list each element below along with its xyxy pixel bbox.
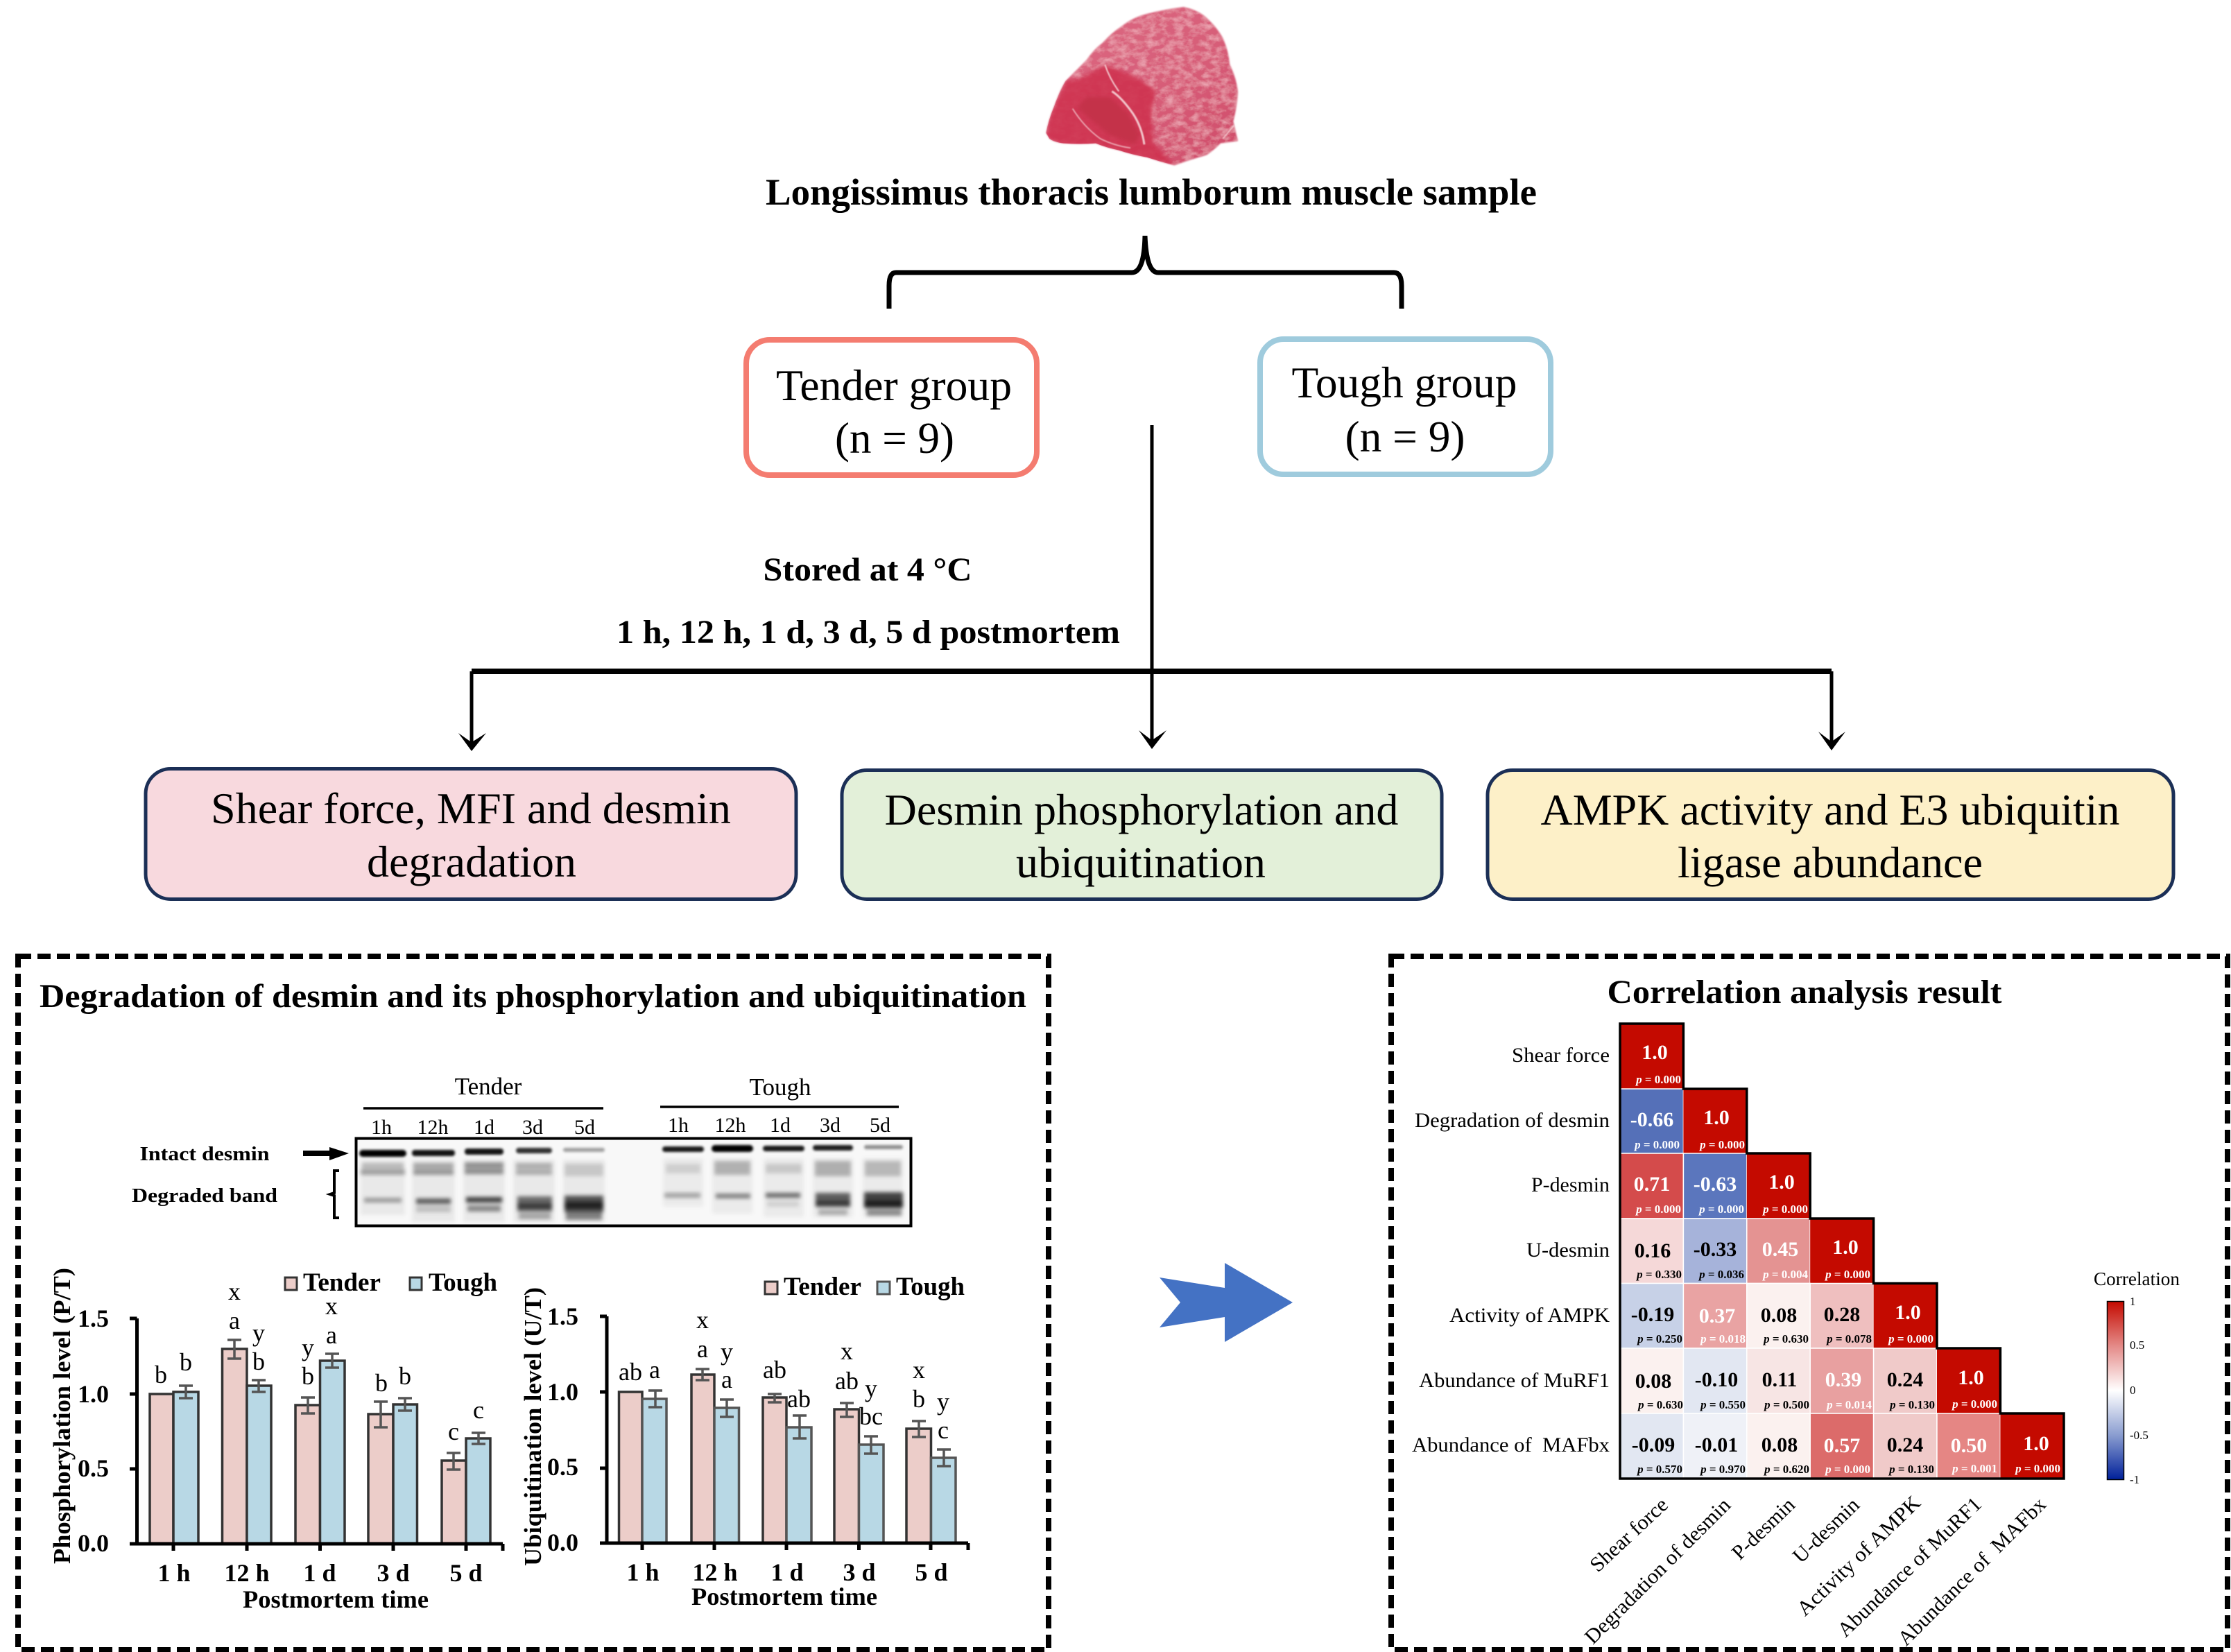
bar chart: phosphorylation <box>49 1268 503 1613</box>
significance letters: b <box>252 1348 265 1375</box>
significance letters: a <box>326 1321 337 1349</box>
arrow: to correlation panel <box>1160 1263 1293 1342</box>
arrow: intact desmin <box>303 1147 349 1160</box>
blot lane labels: 12h <box>714 1114 746 1137</box>
blot lane labels: 5d <box>574 1116 595 1139</box>
x tick labels: 5 d <box>449 1559 483 1587</box>
row: AMPK: p = 0.000 <box>1887 1332 1933 1345</box>
box: tough group <box>1260 339 1551 474</box>
box: tough group: Tough group <box>1291 359 1517 407</box>
x tick labels: 3 d <box>843 1558 876 1586</box>
error bars <box>648 1369 951 1466</box>
row: degradation: p = 0.000 <box>1633 1138 1680 1151</box>
y-axis title: Ubiquitination level (U/T) <box>519 1287 546 1566</box>
significance letters: y <box>721 1338 733 1366</box>
row: MuRF1: p = 0.130 <box>1888 1398 1935 1411</box>
row: U-desmin: 0.45 <box>1762 1238 1798 1261</box>
significance letters: b <box>302 1362 314 1390</box>
y tick labels: 0.0 <box>78 1529 109 1557</box>
y-axis title: Phosphorylation level (P/T) <box>49 1268 76 1564</box>
panel heading: Correlation analysis result <box>1608 974 2002 1010</box>
significance letters: c <box>938 1416 949 1444</box>
legend <box>765 1273 965 1301</box>
row: shear force: p = 0.000 <box>1635 1073 1681 1086</box>
row labels: U-desmin <box>1526 1239 1610 1262</box>
row: MAFbx: p = 0.970 <box>1699 1463 1746 1476</box>
significance letters: bc <box>859 1402 883 1430</box>
row: MAFbx: 0.57 <box>1824 1434 1860 1457</box>
row: degradation: p = 0.000 <box>1698 1138 1745 1151</box>
row: MuRF1 <box>1620 1348 2000 1413</box>
meat photo <box>1046 7 1238 165</box>
row: P-desmin: -0.63 <box>1694 1173 1737 1196</box>
significance letters: a <box>697 1335 708 1363</box>
legend ticks: -1 <box>2130 1473 2139 1486</box>
x tick labels: 12 h <box>692 1558 738 1586</box>
blot group labels <box>363 1073 899 1108</box>
x-axis title: Postmortem time <box>691 1583 877 1610</box>
blot group labels: Tough <box>750 1074 811 1101</box>
row: AMPK: 0.37 <box>1699 1305 1735 1327</box>
column labels: Shear force <box>1585 1493 1673 1576</box>
legend: Tough <box>896 1273 965 1301</box>
x-axis title: Postmortem time <box>243 1585 429 1613</box>
legend ticks: 0 <box>2130 1384 2136 1397</box>
row: U-desmin: p = 0.004 <box>1761 1268 1808 1281</box>
row labels: Degradation of desmin <box>1415 1109 1610 1132</box>
western blot <box>132 1073 911 1226</box>
x tick labels: 1 d <box>303 1559 336 1587</box>
row labels: Activity of AMPK <box>1449 1304 1610 1327</box>
box: shear force: degradation <box>367 837 576 886</box>
row: AMPK: -0.19 <box>1631 1303 1674 1326</box>
x tick labels: 1 d <box>770 1558 804 1586</box>
row: P-desmin: p = 0.000 <box>1761 1203 1808 1216</box>
significance letters: c <box>473 1396 484 1424</box>
column labels <box>1580 1491 2051 1651</box>
blot lane labels: 1h <box>668 1114 689 1137</box>
significance letters: x <box>325 1292 338 1320</box>
error bars <box>179 1340 485 1470</box>
row labels: Abundance of MuRF1 <box>1419 1369 1610 1392</box>
significance letters <box>155 1277 484 1445</box>
legend ticks: 0.5 <box>2130 1339 2144 1352</box>
significance letters: ab <box>763 1356 786 1384</box>
label: degraded band: Degraded band <box>132 1185 277 1207</box>
row: AMPK: p = 0.630 <box>1762 1332 1809 1345</box>
box: desmin modification: Desmin phosphorylation and <box>885 785 1398 834</box>
significance letters: b <box>913 1385 925 1413</box>
box: tender group: Tender group <box>776 361 1012 410</box>
row: shear force: 1.0 <box>1642 1041 1668 1064</box>
row labels: Abundance of MAFbx <box>1412 1434 1610 1456</box>
row: U-desmin: 1.0 <box>1832 1236 1859 1259</box>
significance letters: ab <box>619 1358 642 1386</box>
row: MAFbx: p = 0.001 <box>1951 1462 1997 1475</box>
legend ticks: 1 <box>2130 1295 2136 1308</box>
intact bands <box>359 1145 903 1157</box>
y tick labels: 1.5 <box>547 1302 578 1330</box>
row: MAFbx: p = 0.570 <box>1636 1463 1682 1476</box>
panel: degradation <box>18 956 1049 1650</box>
upper degraded bands <box>361 1161 901 1176</box>
blot lane labels: 3d <box>820 1114 841 1137</box>
significance letters: y <box>865 1375 877 1402</box>
row: AMPK: 0.08 <box>1761 1304 1797 1327</box>
column labels: Activity of AMPK <box>1793 1491 1925 1621</box>
legend <box>285 1268 497 1297</box>
row: P-desmin <box>1620 1153 1810 1219</box>
blot lane labels: 1d <box>474 1116 494 1139</box>
significance letters: a <box>721 1366 732 1393</box>
blot lane labels: 5d <box>870 1114 890 1137</box>
significance letters: b <box>399 1362 411 1390</box>
y tick labels: 0.5 <box>547 1453 578 1481</box>
row: MuRF1: -0.10 <box>1695 1368 1738 1391</box>
axes <box>600 1316 968 1550</box>
significance letters: x <box>696 1306 709 1334</box>
row: MAFbx: p = 0.000 <box>1824 1463 1870 1476</box>
blot lane labels: 1d <box>770 1114 791 1137</box>
legend ticks <box>2130 1295 2148 1486</box>
row: U-desmin: -0.33 <box>1694 1238 1737 1261</box>
x tick labels: 5 d <box>915 1558 948 1586</box>
label: intact desmin: Intact desmin <box>140 1143 269 1165</box>
column labels: Abundance of MAFbx <box>1893 1493 2051 1651</box>
row: MuRF1: p = 0.500 <box>1763 1398 1809 1411</box>
row: MuRF1: p = 0.630 <box>1637 1398 1683 1411</box>
significance letters: x <box>913 1356 925 1384</box>
row: shear force <box>1620 1024 1683 1089</box>
significance letters: ab <box>787 1385 811 1413</box>
y tick labels: 1.0 <box>547 1378 578 1406</box>
blot lane labels: 1h <box>371 1116 392 1139</box>
row: P-desmin: p = 0.000 <box>1698 1203 1744 1216</box>
significance letters: x <box>841 1337 853 1365</box>
x tick labels: 1 h <box>626 1558 660 1586</box>
row: MuRF1: 0.39 <box>1825 1368 1861 1391</box>
significance letters: a <box>649 1356 660 1384</box>
y tick labels: 1.0 <box>78 1380 109 1408</box>
box: tough group: (n = 9) <box>1345 413 1465 461</box>
row: MAFbx: p = 0.620 <box>1763 1463 1809 1476</box>
row: degradation: 1.0 <box>1703 1106 1730 1129</box>
significance letters: b <box>180 1348 192 1376</box>
significance letters: b <box>155 1361 167 1388</box>
row: U-desmin: p = 0.330 <box>1635 1268 1682 1281</box>
y tick labels: 1.5 <box>78 1305 109 1332</box>
row: MAFbx: p = 0.000 <box>2014 1462 2060 1475</box>
row: MAFbx: 0.08 <box>1761 1434 1798 1456</box>
row: MAFbx: 0.50 <box>1951 1434 1987 1457</box>
column labels: Degradation of desmin <box>1580 1494 1735 1649</box>
blot image <box>356 1139 911 1226</box>
colour bar <box>2107 1301 2124 1480</box>
row: MuRF1: p = 0.014 <box>1825 1398 1872 1411</box>
tough lane smears <box>663 1158 903 1217</box>
row: MuRF1: 0.08 <box>1635 1370 1671 1393</box>
box: shear force <box>146 768 796 899</box>
x tick labels: 12 h <box>224 1559 270 1587</box>
row: AMPK: p = 0.250 <box>1636 1332 1682 1345</box>
row: MAFbx: p = 0.130 <box>1888 1463 1934 1476</box>
box: tender group: (n = 9) <box>835 414 954 463</box>
y tick labels: 0.5 <box>78 1454 109 1482</box>
row: degradation: -0.66 <box>1630 1108 1673 1131</box>
row: MAFbx: 1.0 <box>2023 1432 2049 1455</box>
row: MuRF1: 0.11 <box>1762 1368 1797 1391</box>
blot lane labels <box>371 1114 890 1139</box>
row: U-desmin: p = 0.000 <box>1824 1268 1870 1281</box>
x tick labels: 1 h <box>157 1559 191 1587</box>
significance letters: y <box>252 1319 265 1347</box>
row labels <box>1412 1044 1610 1456</box>
box: shear force: Shear force, MFI and desmin <box>211 784 731 833</box>
row: MuRF1: 0.24 <box>1887 1368 1923 1391</box>
y tick labels <box>78 1305 109 1557</box>
x tick labels <box>626 1558 948 1586</box>
x tick labels: 3 d <box>377 1559 410 1587</box>
row: P-desmin: 0.71 <box>1634 1173 1670 1196</box>
row: MuRF1: p = 0.000 <box>1951 1397 1997 1411</box>
box: AMPK and E3 ligase <box>1488 770 2173 899</box>
postmortem times: 1 h, 12 h, 1 d, 3 d, 5 d postmortem <box>617 614 1120 651</box>
x tick labels <box>157 1559 483 1587</box>
legend: Tender <box>784 1273 861 1301</box>
row: U-desmin <box>1620 1219 1874 1283</box>
significance letters <box>619 1306 949 1444</box>
box: desmin modification <box>842 770 1442 899</box>
box: tender group <box>746 340 1037 475</box>
significance letters: y <box>937 1388 949 1416</box>
legend ticks: -0.5 <box>2130 1429 2148 1442</box>
brace: degraded band <box>330 1171 339 1218</box>
significance letters: x <box>228 1277 241 1305</box>
significance letters: a <box>229 1307 240 1334</box>
box: desmin modification: ubiquitination <box>1016 838 1266 887</box>
row: degradation <box>1620 1089 1747 1153</box>
legend: Tender <box>303 1268 381 1297</box>
bracket to groups <box>889 236 1402 309</box>
row: P-desmin: p = 0.000 <box>1635 1203 1681 1216</box>
column labels: Abundance of MuRF1 <box>1833 1492 1986 1642</box>
row: MAFbx <box>1620 1413 2064 1479</box>
blot lane labels: 3d <box>522 1116 543 1139</box>
row: MAFbx: -0.09 <box>1632 1434 1675 1456</box>
bar chart: ubiquitination <box>519 1273 968 1610</box>
significance letters: b <box>375 1369 388 1397</box>
colour legend <box>2094 1268 2180 1486</box>
row: AMPK: 0.28 <box>1824 1303 1860 1326</box>
row labels: P-desmin <box>1531 1173 1610 1196</box>
significance letters: ab <box>835 1367 859 1395</box>
storage temperature: Stored at 4 °C <box>763 551 972 588</box>
row: U-desmin: p = 0.036 <box>1698 1268 1744 1281</box>
panel heading: Degradation of desmin and its phosphorylation and ubiquitination <box>40 978 1026 1015</box>
lower degraded bands tough <box>664 1192 903 1216</box>
column labels: P-desmin <box>1728 1493 1800 1565</box>
title: Longissimus thoracis lumborum muscle sample <box>766 171 1537 213</box>
axes <box>130 1318 503 1551</box>
row labels: Shear force <box>1512 1044 1610 1067</box>
tough bars <box>173 1361 490 1544</box>
significance letters: y <box>302 1334 314 1361</box>
y tick labels: 0.0 <box>547 1529 578 1556</box>
row: MAFbx: -0.01 <box>1695 1434 1738 1456</box>
tender lane smears <box>361 1160 605 1222</box>
column labels: U-desmin <box>1789 1493 1864 1567</box>
box: AMPK and E3 ligase: AMPK activity and E3 ubiquitin <box>1541 785 2119 834</box>
row: MuRF1: 1.0 <box>1958 1366 1984 1389</box>
row: AMPK: 1.0 <box>1895 1301 1921 1324</box>
significance letters: c <box>448 1418 459 1445</box>
row: MAFbx: 0.24 <box>1887 1434 1923 1456</box>
blot group labels: Tender <box>455 1073 522 1100</box>
box: AMPK and E3 ligase: ligase abundance <box>1678 838 1983 887</box>
y tick labels <box>547 1302 578 1556</box>
lower degraded bands tender <box>364 1196 603 1220</box>
heatmap <box>1620 1024 2064 1479</box>
legend title: Correlation <box>2094 1268 2180 1289</box>
legend: Tough <box>429 1268 497 1297</box>
tender bars <box>619 1375 931 1543</box>
tender bars <box>150 1349 466 1544</box>
tough bars <box>642 1399 956 1543</box>
panel: correlation <box>1391 956 2228 1651</box>
row: AMPK <box>1620 1283 1937 1348</box>
row: U-desmin: 0.16 <box>1635 1239 1671 1262</box>
row: P-desmin: 1.0 <box>1768 1171 1795 1194</box>
row: MuRF1: p = 0.550 <box>1699 1398 1746 1411</box>
row: AMPK: p = 0.078 <box>1825 1332 1872 1345</box>
row: AMPK: p = 0.018 <box>1699 1332 1746 1345</box>
blot lane labels: 12h <box>417 1116 448 1139</box>
flow arrows <box>458 425 1845 751</box>
